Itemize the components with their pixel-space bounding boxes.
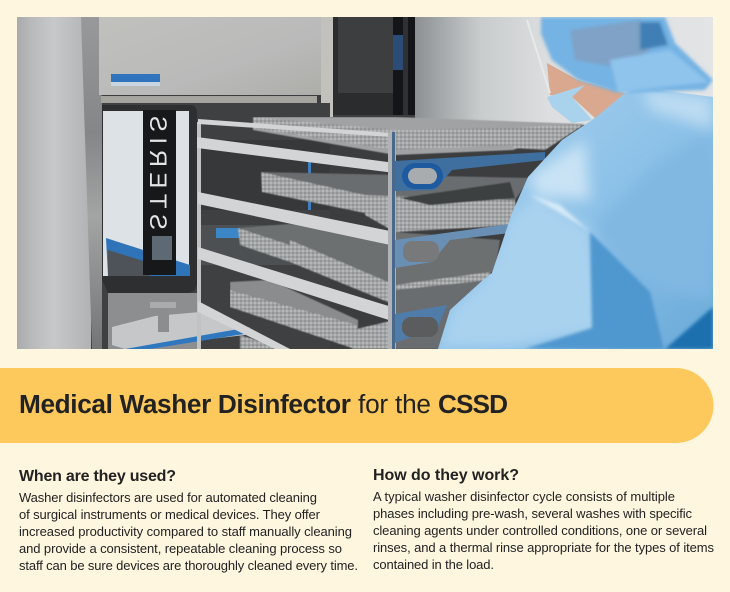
body text: and provide a consistent, repeatable cleaning process so xyxy=(19,541,342,556)
gown xyxy=(438,88,713,349)
washer top hood with badge xyxy=(99,17,333,117)
bouffant cap xyxy=(541,17,713,93)
heading: How do they work? xyxy=(373,467,519,484)
body text xyxy=(19,490,358,573)
photo: washer disinfector and operator xyxy=(17,17,713,349)
body text: A typical washer disinfector cycle consists of multiple xyxy=(373,489,675,504)
body text: Washer disinfectors are used for automated cleaning xyxy=(19,490,317,505)
body text: cleaning agents under controlled conditions, one or several xyxy=(373,523,707,538)
body text: phases including pre-wash, several washes with specific xyxy=(373,506,692,521)
body text xyxy=(373,489,714,572)
title: for the xyxy=(358,389,431,419)
text block: how do they work xyxy=(373,467,714,572)
gown folds xyxy=(438,88,713,349)
face shield xyxy=(527,20,550,93)
instrument baskets xyxy=(230,117,585,349)
spray arm and chamber floor xyxy=(108,293,250,349)
body text: rinses, and a thermal rinse appropriate for the types of items xyxy=(373,540,714,555)
title: CSSD xyxy=(438,389,508,419)
body text: of surgical instruments or medical devices. They offer xyxy=(19,507,321,522)
body text: contained in the load. xyxy=(373,557,494,572)
heading: When are they used? xyxy=(19,468,176,485)
title: Medical Washer Disinfector xyxy=(19,389,351,419)
neck xyxy=(547,63,625,118)
mirrored logo: STERIS xyxy=(144,116,171,230)
door window with Steris label xyxy=(102,105,197,293)
blue rack handle plates xyxy=(395,152,545,343)
rack frame xyxy=(197,119,396,349)
wall xyxy=(415,17,713,125)
washer cabinet: left column xyxy=(17,17,110,349)
body text: increased productivity compared to staff manually cleaning xyxy=(19,524,352,539)
washer interior xyxy=(102,103,330,349)
title xyxy=(19,389,508,419)
text block: when are they used xyxy=(19,468,358,573)
operator in blue gown xyxy=(438,17,713,349)
title banner xyxy=(0,368,714,443)
body text: staff can be sure devices are thoroughly cleaned every time. xyxy=(19,558,358,573)
surgical mask xyxy=(547,85,592,123)
dark control panel and gap xyxy=(333,17,415,115)
